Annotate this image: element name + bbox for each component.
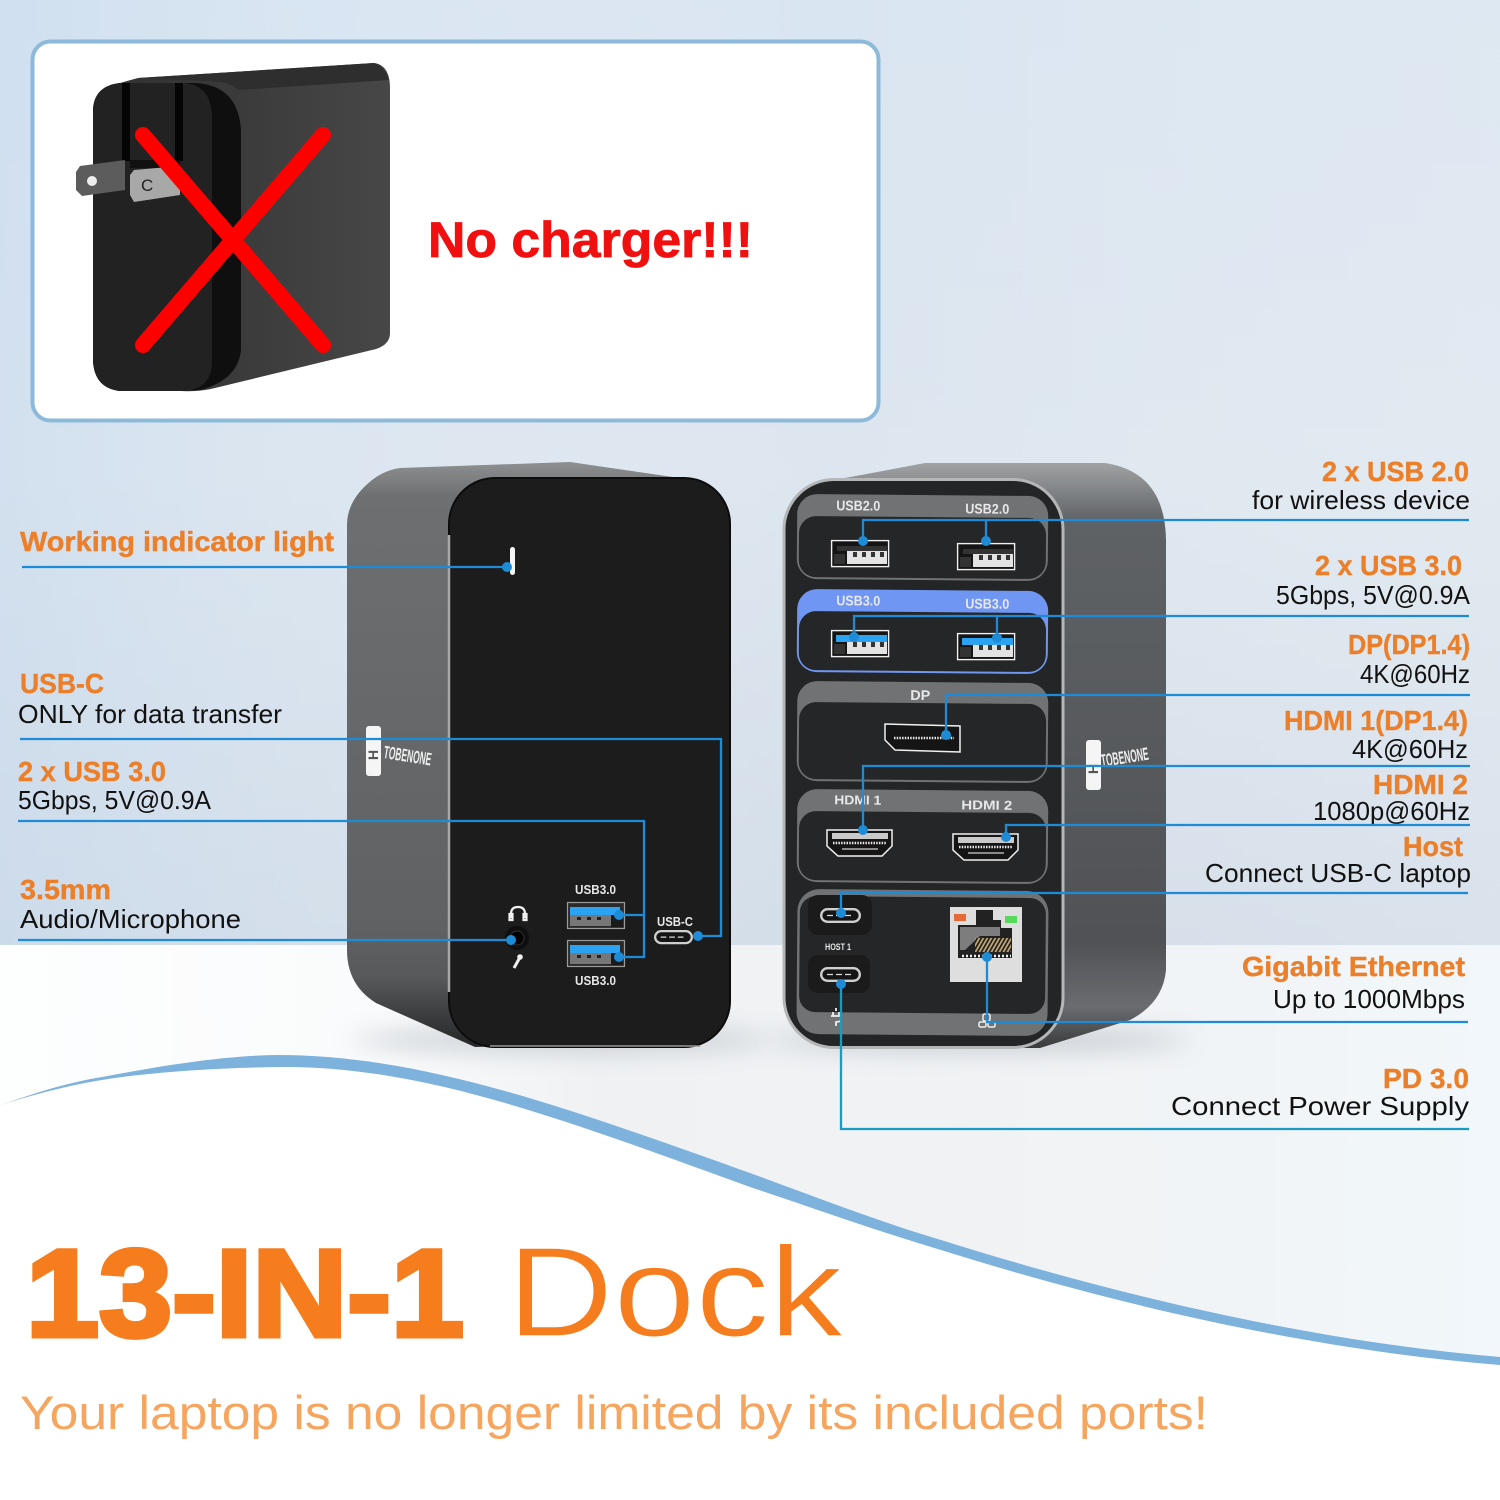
USB-C power port	[821, 968, 860, 981]
heading: Working indicator light	[20, 526, 334, 557]
anchor dot	[858, 825, 868, 835]
description: for wireless device	[1252, 485, 1470, 515]
floor shadows under docks	[350, 1028, 1190, 1052]
leader line	[863, 766, 1470, 830]
port group: HDMI	[797, 789, 1048, 884]
leader line	[18, 821, 644, 957]
description: ONLY for data transfer	[18, 699, 282, 729]
HDMI 1 label: HDMI 1	[834, 792, 881, 808]
USB 2.0 port right	[958, 544, 1015, 570]
leader line	[1006, 825, 1470, 837]
USB-C port	[655, 931, 692, 943]
dock side body	[845, 463, 1166, 1048]
background wall	[0, 0, 1500, 946]
leader line	[987, 957, 1468, 1022]
USB 2.0 port left	[832, 541, 889, 567]
no charger text: No charger!!!	[428, 212, 753, 268]
port group: USB 2.0	[797, 494, 1048, 581]
callout: PD 3.0	[836, 979, 1469, 1129]
microphone head	[517, 954, 523, 960]
USB 2.0 label right: USB2.0	[965, 500, 1010, 517]
description: Connect USB-C laptop	[1205, 858, 1471, 888]
leader line	[841, 984, 1469, 1129]
indicator light	[510, 547, 515, 575]
callout: rear USB 2.0	[858, 456, 1470, 546]
icon: headphones	[510, 907, 526, 920]
TOBENONE logo: H	[365, 750, 381, 760]
dock front face	[449, 478, 730, 1047]
callout: HDMI 2	[1001, 769, 1470, 842]
icon: crossed-out charger	[76, 63, 390, 391]
callout: HDMI 1	[858, 705, 1470, 835]
TOBENONE logo	[1085, 740, 1150, 790]
panel: no charger	[32, 42, 878, 420]
anchor dot	[506, 935, 516, 945]
title bold part: 13-IN-1	[26, 1225, 464, 1363]
heading: USB-C	[20, 668, 104, 699]
heading: DP(DP1.4)	[1348, 629, 1470, 660]
HDMI 1 port	[827, 830, 892, 856]
callout: host	[836, 831, 1471, 918]
USB 3.0 port bottom	[568, 940, 624, 966]
host label: HOST 1	[825, 942, 851, 952]
title	[26, 1221, 844, 1364]
icon: power plug	[831, 1008, 841, 1026]
callout: front USB 3.0	[18, 756, 644, 962]
anchor dot	[836, 908, 846, 918]
USB 3.0 label bottom: USB3.0	[575, 973, 616, 988]
anchor dot	[1001, 832, 1011, 842]
TOBENONE logo: H	[1085, 764, 1101, 774]
callout: rear USB 3.0	[849, 550, 1471, 643]
anchor dot	[941, 730, 951, 740]
USB 3.0 port left	[832, 631, 889, 657]
USB-C label: USB-C	[657, 914, 694, 929]
dock: rear view: TOBENONE	[1099, 744, 1150, 771]
dock rear face	[784, 480, 1063, 1048]
heading: 2 x USB 2.0	[1322, 456, 1469, 487]
white lower area	[0, 1067, 1500, 1500]
DP port	[885, 724, 960, 752]
description: 5Gbps, 5V@0.9A	[18, 785, 212, 815]
callout: gigabit ethernet	[982, 951, 1468, 1022]
port group: host and ethernet	[796, 889, 1049, 1036]
heading: Host	[1403, 831, 1463, 862]
heading: PD 3.0	[1383, 1063, 1469, 1094]
description: Connect Power Supply	[1171, 1091, 1469, 1121]
anchor dot	[982, 952, 992, 962]
description: Audio/Microphone	[20, 904, 241, 934]
description: 1080p@60Hz	[1313, 796, 1470, 826]
USB 3.0 label top: USB3.0	[575, 882, 616, 897]
description: Up to 1000Mbps	[1273, 984, 1465, 1014]
dock side body	[347, 462, 680, 1047]
description: 5Gbps, 5V@0.9A	[1276, 580, 1471, 610]
ethernet port	[950, 907, 1022, 982]
anchor dot	[502, 562, 512, 572]
background floor	[0, 945, 1500, 1500]
subtitle: Your laptop is no longer limited by its included ports!	[20, 1386, 1208, 1439]
leader line	[18, 939, 511, 941]
leader line	[854, 616, 1469, 638]
TOBENONE logo	[365, 726, 433, 776]
HDMI 2 port	[953, 834, 1018, 860]
icon: network	[979, 1014, 995, 1027]
heading: HDMI 2	[1373, 769, 1468, 800]
heading: 3.5mm	[20, 874, 111, 905]
callout: audio jack	[18, 874, 516, 945]
leader line	[20, 739, 721, 936]
heading: 2 x USB 3.0	[1315, 550, 1462, 581]
USB 2.0 label left: USB2.0	[836, 497, 881, 514]
anchor dots	[614, 910, 624, 962]
anchor dots	[858, 536, 991, 546]
HDMI 2 label: HDMI 2	[961, 797, 1012, 813]
USB 3.0 port right	[958, 634, 1015, 660]
heading: Gigabit Ethernet	[1242, 951, 1465, 982]
dock: rear view	[784, 463, 1166, 1048]
USB-C host port	[821, 909, 860, 922]
port group: USB 3.0	[797, 589, 1048, 674]
dock: front view	[347, 462, 730, 1047]
port group: DP	[797, 681, 1048, 783]
leader line	[946, 695, 1470, 735]
icon: crossed-out charger: C	[141, 176, 153, 195]
description: 4K@60Hz	[1352, 734, 1468, 764]
anchor dot	[836, 979, 846, 989]
leader line	[863, 520, 1469, 541]
blue wave	[0, 1055, 1500, 1365]
callout: working indicator light	[20, 526, 512, 572]
heading: 2 x USB 3.0	[18, 756, 166, 787]
audio jack	[505, 926, 529, 950]
icon: microphone	[514, 959, 519, 968]
heading: HDMI 1(DP1.4)	[1284, 705, 1468, 736]
DP contacts	[894, 737, 954, 739]
callout: USB-C data	[18, 668, 721, 941]
USB 3.0 label left: USB3.0	[836, 592, 881, 609]
USB 3.0 port top	[568, 902, 624, 928]
DP label: DP	[910, 687, 930, 703]
leader line	[22, 566, 507, 568]
anchor dot	[693, 931, 703, 941]
USB 3.0 label right: USB3.0	[965, 595, 1009, 612]
title light part: Dock	[507, 1221, 844, 1364]
description: 4K@60Hz	[1360, 659, 1470, 689]
leader line	[841, 893, 1468, 913]
anchor dots	[849, 632, 1002, 643]
callout: DP	[941, 629, 1470, 740]
dock: front view: TOBENONE	[382, 742, 433, 769]
